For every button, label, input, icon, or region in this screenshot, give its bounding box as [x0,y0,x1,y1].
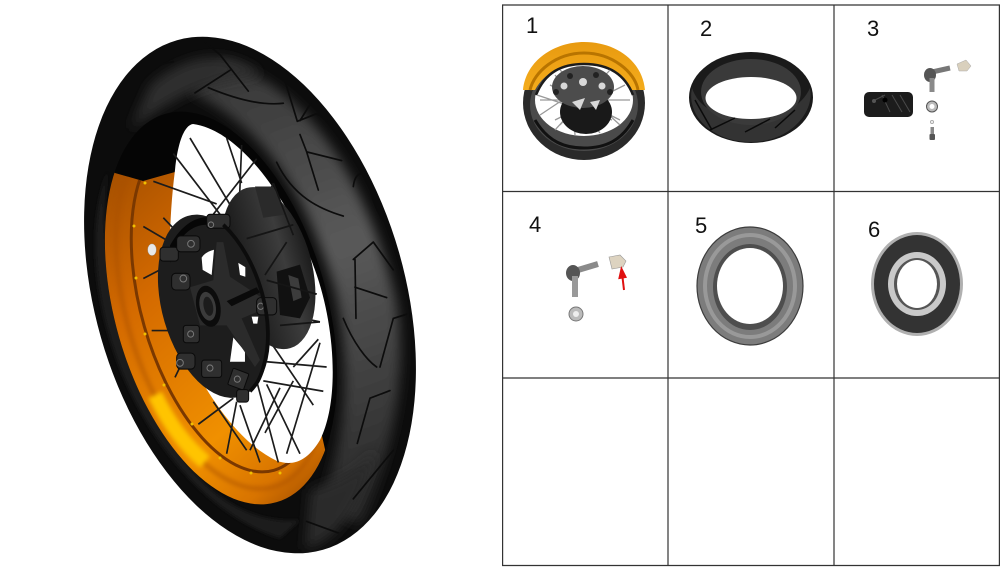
part 4: valve and cap [529,212,626,321]
tyre body [84,36,416,554]
red arrow [620,269,626,290]
hub spider [190,242,267,367]
valve cap [957,60,971,71]
brake drum behind hub [205,176,332,361]
part 3: sensor kit [864,16,971,140]
part 2: tyre [689,16,813,143]
tread grooves [194,53,404,534]
valve cap [148,244,156,256]
part 6: bearing [868,217,963,336]
white wheel opening [170,124,333,463]
valve stem [578,264,598,270]
spokes [143,138,327,462]
number 6: 6 [868,217,880,242]
hub disc [138,200,290,412]
part 1: wheel assembly [523,13,645,160]
nut [926,101,938,112]
number 2: 2 [700,16,712,41]
part 5: seal ring [695,213,803,345]
orange rim band [104,172,326,504]
nut [569,307,583,321]
valve stem [932,68,950,72]
valve cap [609,255,626,269]
number 5: 5 [695,213,707,238]
sensor block [864,92,913,117]
number 4: 4 [529,212,541,237]
hub bearing [192,283,224,329]
number 3: 3 [867,16,879,41]
number 1: 1 [526,13,538,38]
black rim band [63,85,379,531]
hub openings [202,250,258,362]
parts grid [503,5,999,566]
brake disc ring [223,225,268,391]
hub bolts [160,214,277,402]
screw [930,120,934,124]
panel: main wheel illustration [84,36,416,554]
